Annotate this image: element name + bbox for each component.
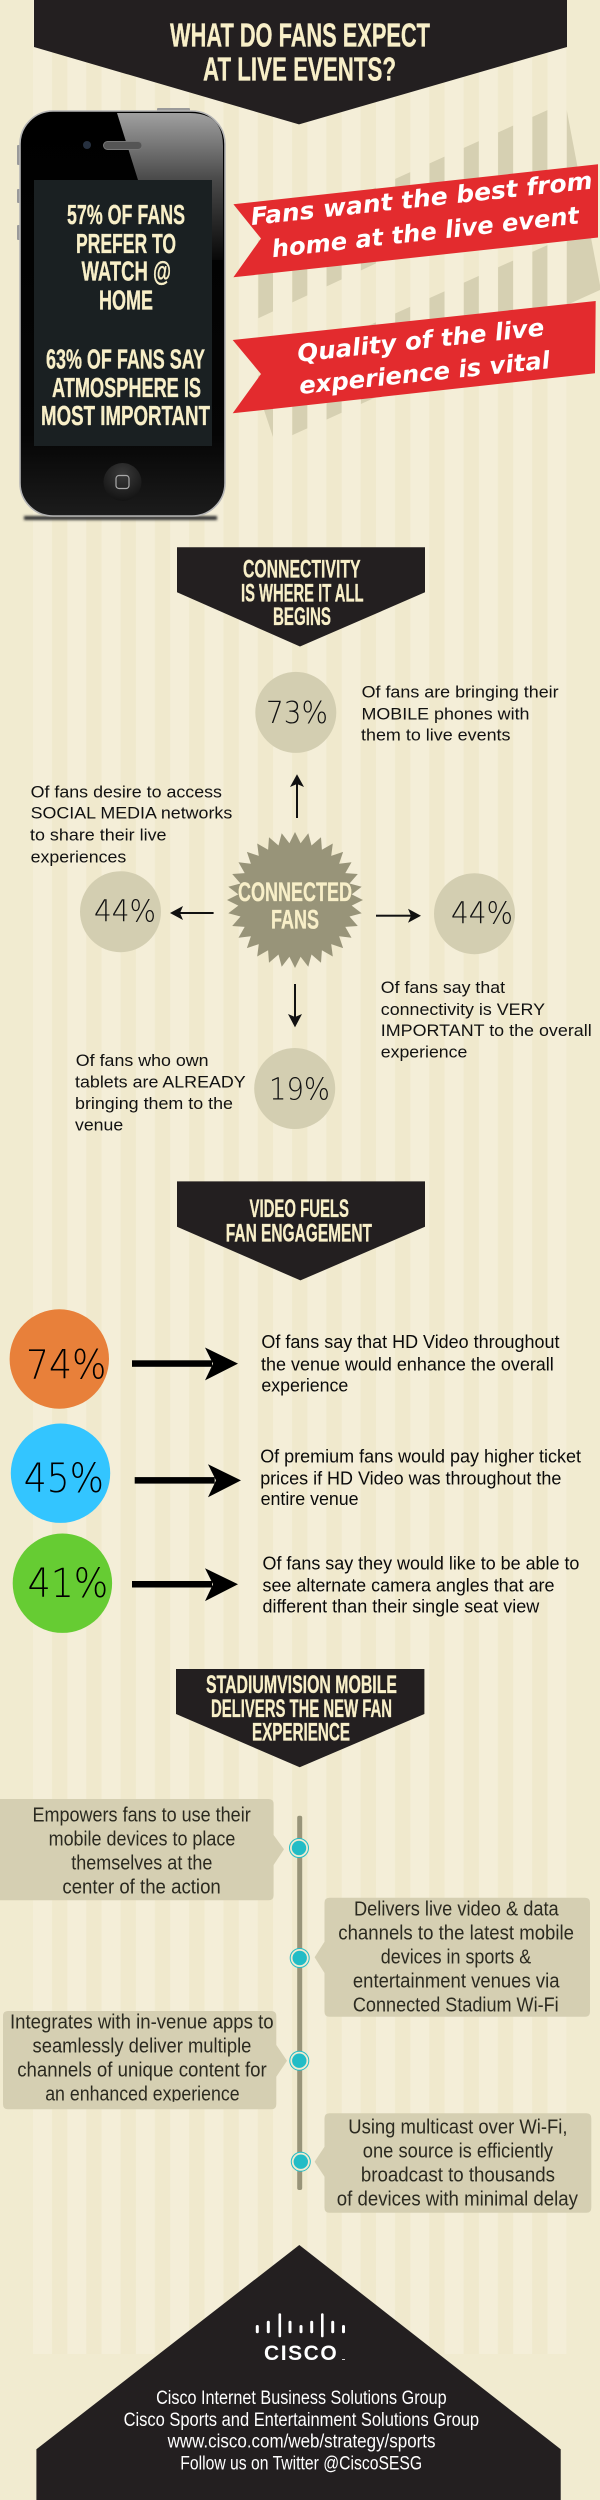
arrow: up — [290, 774, 304, 818]
title banner: AT LIVE EVENTS? — [203, 50, 396, 88]
stat: 45% premium fans: prices if HD Video was throughout the — [260, 1468, 561, 1488]
stat: 44% social media: experiences — [31, 847, 126, 866]
starburst: connected fans: FANS — [271, 904, 319, 934]
stat: 45% premium fans: Of premium fans would pay higher ticket — [260, 1446, 581, 1466]
icon: cisco logo — [256, 2313, 345, 2365]
stat: 19% tablets: Of fans who own — [76, 1051, 209, 1070]
heading: connectivity: CONNECTIVITY — [243, 555, 361, 583]
timeline node 1 — [290, 1838, 308, 1858]
stat: 74% hd video: 74% — [26, 1343, 106, 1389]
ribbon: fans want the best: home at the live event — [270, 201, 582, 263]
heading: video: VIDEO FUELS — [250, 1195, 349, 1223]
callout: integrates with apps: channels of unique content for — [17, 2060, 267, 2082]
callout: using multicast: Using multicast over Wi-Fi, — [348, 2117, 568, 2139]
heading: stadiumvision: DELIVERS THE NEW FAN — [211, 1695, 392, 1723]
starburst: connected fans: CONNECTED — [238, 877, 352, 907]
ribbon: fans want the best: Fans want the best from — [249, 167, 594, 231]
timeline node 4 — [291, 2152, 310, 2171]
callout: delivers live video: Delivers live video & data — [354, 1899, 559, 1921]
stat: 74% hd video: Of fans say that HD Video throughout — [261, 1332, 560, 1352]
title banner — [34, 0, 567, 124]
ribbon: quality of the live experience: experience is vital — [298, 346, 552, 400]
callout: using multicast: broadcast to thousands — [361, 2165, 555, 2187]
footer panel: Cisco Internet Business Solutions Group — [156, 2388, 447, 2409]
stat: 41% camera angles: different than their single seat view — [262, 1596, 540, 1616]
title banner: WHAT DO FANS EXPECT — [170, 17, 430, 54]
phone — [17, 108, 225, 520]
timeline node 2 — [290, 1948, 309, 1968]
callout: integrates with apps: Integrates with in-venue apps to — [10, 2012, 274, 2034]
stat: 44% very important: connectivity is VERY — [381, 1000, 545, 1019]
callout: delivers live video: channels to the latest mobile — [338, 1923, 574, 1945]
callout: empowers fans: mobile devices to place — [49, 1829, 235, 1851]
callout: delivers live video — [315, 1898, 590, 2017]
callout: using multicast — [315, 2113, 591, 2213]
stat: 44% social media: Of fans desire to access — [31, 783, 222, 802]
phone screen: MOST IMPORTANT — [41, 400, 210, 431]
arrow: down — [288, 984, 302, 1027]
phone screen: 63% OF FANS SAY — [46, 344, 205, 374]
callout: delivers live video: devices in sports & — [381, 1947, 532, 1969]
stat: 73% mobile phones — [255, 672, 559, 753]
stat: 73% mobile phones: them to live events — [361, 726, 510, 744]
stat: 45% premium fans: 45% — [24, 1456, 104, 1502]
stat: 45% premium fans — [11, 1424, 581, 1523]
stat: 74% hd video: experience — [261, 1375, 348, 1395]
heading: stadiumvision: EXPERIENCE — [252, 1719, 350, 1747]
phone screen: PREFER TO — [76, 228, 176, 259]
callout: integrates with apps: seamlessly deliver multiple — [32, 2036, 251, 2058]
stat: 74% hd video — [10, 1309, 560, 1409]
callout: empowers fans: themselves at the — [71, 1853, 212, 1875]
stat: 44% very important: Of fans say that — [381, 978, 505, 997]
ribbon: quality of the live experience — [233, 301, 596, 413]
callout: empowers fans: Empowers fans to use their — [32, 1805, 251, 1827]
starburst: connected fans — [227, 832, 363, 968]
footer panel — [36, 2245, 561, 2500]
stat: 45% premium fans: entire venue — [261, 1489, 359, 1509]
arrow: left — [170, 906, 214, 920]
icon: cisco logo: CISCO — [264, 2342, 337, 2365]
heading: video — [177, 1181, 425, 1280]
stat: 41% camera angles — [13, 1534, 579, 1633]
stat: 19% tablets: venue — [75, 1116, 123, 1135]
stat: 73% mobile phones: 73% — [266, 696, 328, 731]
stat: 19% tablets — [75, 1048, 335, 1135]
heading: connectivity: BEGINS — [273, 603, 331, 631]
heading: connectivity — [177, 547, 425, 646]
stat: 44% social media: 44% — [94, 895, 156, 930]
stat: 44% very important — [381, 873, 592, 1062]
stat: 44% social media: SOCIAL MEDIA networks — [31, 804, 232, 822]
callout: empowers fans: center of the action — [62, 1877, 221, 1899]
footer panel: Cisco Sports and Entertainment Solutions Group — [124, 2410, 479, 2431]
phone screen — [34, 180, 212, 446]
arrow: right — [376, 909, 421, 923]
phone screen: HOME — [99, 284, 153, 315]
stat: 44% very important: 44% — [451, 897, 513, 932]
stat: 44% social media — [30, 783, 232, 952]
stat: 44% very important: experience — [381, 1042, 467, 1062]
stat: 74% hd video: the venue would enhance the overall — [261, 1354, 554, 1374]
callout: empowers fans — [0, 1799, 284, 1900]
phone screen: WATCH @ — [82, 256, 171, 287]
phone screen: ATMOSPHERE IS — [52, 372, 201, 403]
heading: connectivity: IS WHERE IT ALL — [241, 580, 364, 608]
callout: using multicast: of devices with minimal delay — [337, 2189, 578, 2211]
stat: 41% camera angles: see alternate camera angles that are — [262, 1575, 554, 1595]
heading: stadiumvision — [176, 1669, 424, 1767]
stat: 44% social media: to share their live — [30, 826, 166, 845]
callout: using multicast: one source is efficiently — [363, 2141, 553, 2163]
heading: stadiumvision: STADIUMVISION MOBILE — [206, 1671, 397, 1699]
stat: 73% mobile phones: MOBILE phones with — [362, 705, 530, 724]
ribbon: quality of the live experience: Quality of the live — [296, 313, 546, 368]
stat: 19% tablets: 19% — [269, 1073, 330, 1108]
footer panel: Follow us on Twitter @CiscoSESG — [180, 2453, 422, 2474]
callout: delivers live video: Connected Stadium Wi-Fi — [353, 1995, 559, 2017]
sunburst rays behind ribbons — [258, 110, 600, 443]
stat: 19% tablets: tablets are ALREADY — [75, 1073, 246, 1092]
stat: 41% camera angles: 41% — [28, 1561, 108, 1607]
timeline node 3 — [290, 2051, 309, 2070]
phone home button — [104, 463, 142, 501]
stat: 19% tablets: bringing them to the — [75, 1094, 233, 1113]
footer panel: www.cisco.com/web/strategy/sports — [167, 2431, 436, 2452]
ribbon: fans want the best — [233, 164, 598, 277]
stat: 41% camera angles: Of fans say they would like to be able to — [262, 1553, 579, 1573]
stat: 44% very important: IMPORTANT to the overall — [381, 1021, 592, 1040]
heading: video: FAN ENGAGEMENT — [226, 1219, 372, 1247]
callout: delivers live video: entertainment venues via — [353, 1971, 560, 1993]
phone screen: 57% OF FANS — [67, 199, 185, 230]
callout: integrates with apps: an enhanced experience — [45, 2084, 240, 2106]
timeline line — [297, 1816, 302, 2190]
stat: 73% mobile phones: Of fans are bringing their — [362, 682, 559, 702]
callout: integrates with apps — [3, 2011, 287, 2109]
